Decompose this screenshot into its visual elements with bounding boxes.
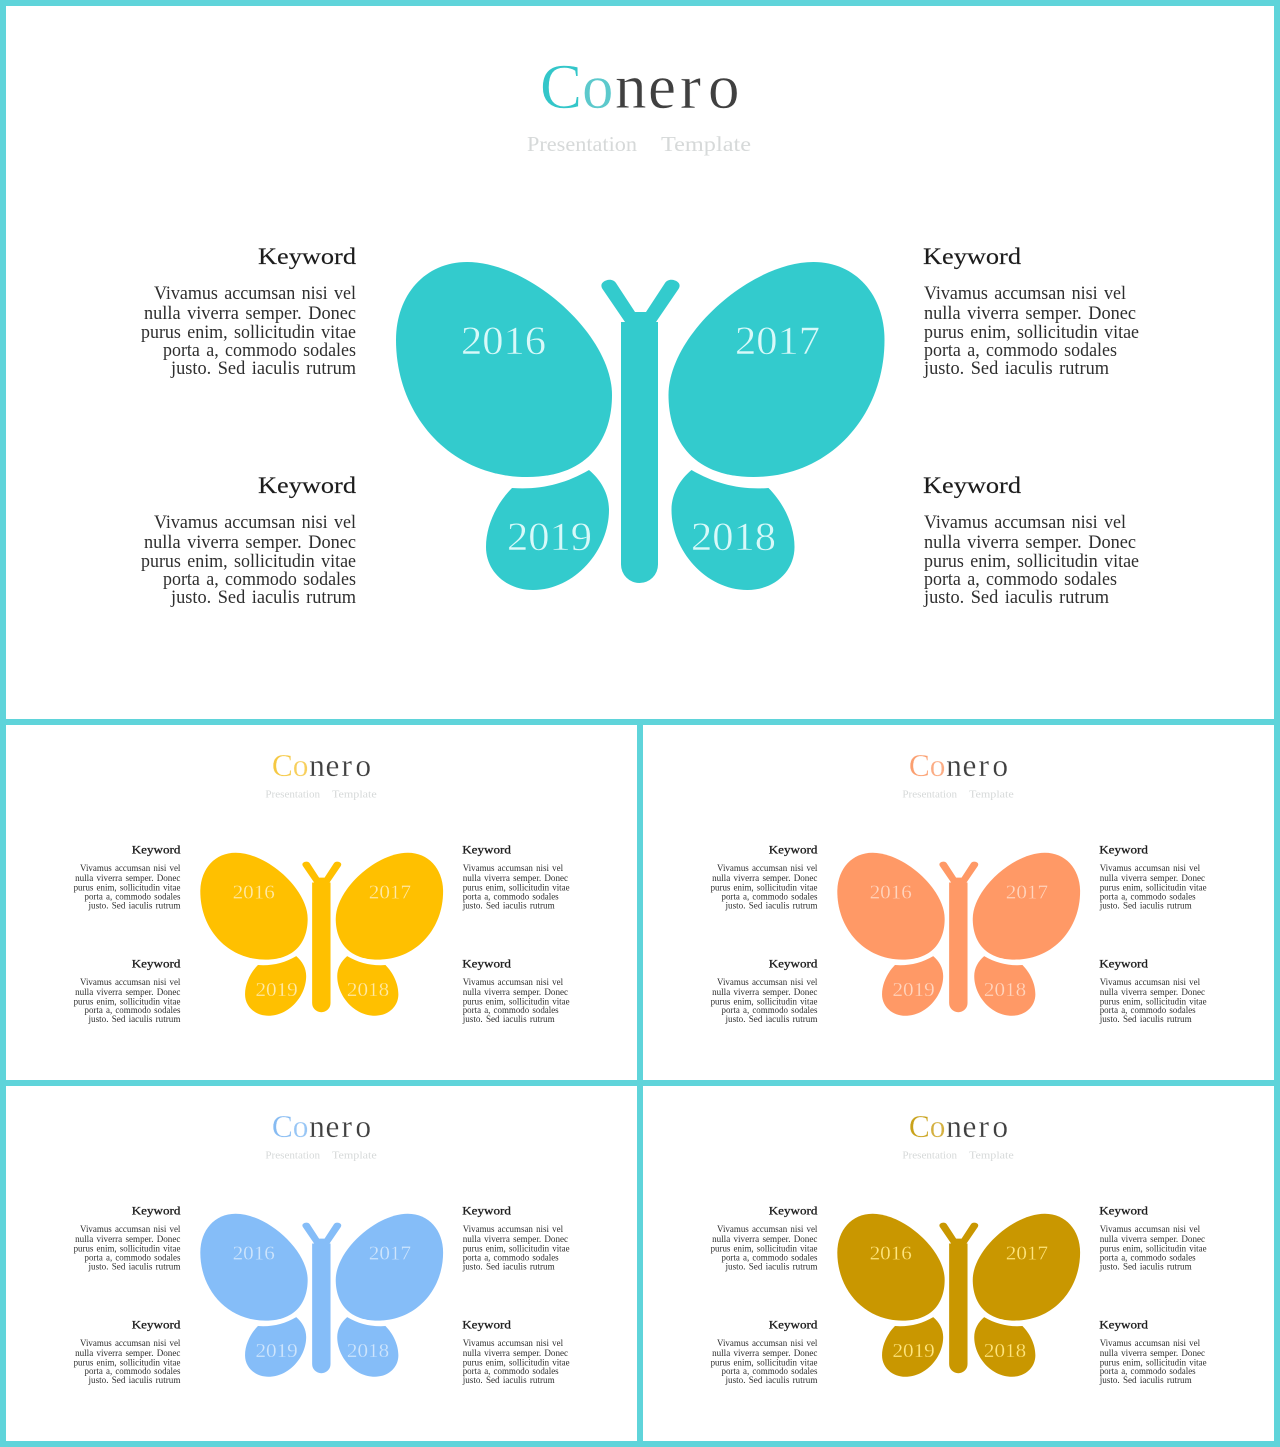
text block: top left: nulla viverra semper. Donec xyxy=(75,874,180,884)
text block: bottom left: Keyword xyxy=(258,473,356,499)
text block: top left: porta a, commodo sodales xyxy=(163,340,356,361)
butterfly: blue xyxy=(200,1214,443,1377)
year labels xyxy=(233,881,411,1001)
year labels xyxy=(233,1242,411,1362)
text block: top left: porta a, commodo sodales xyxy=(722,892,818,902)
text block: bottom right: justo. Sed iaculis rutrum xyxy=(1099,1015,1192,1025)
title: nero xyxy=(309,748,371,783)
text block: bottom right: porta a, commodo sodales xyxy=(924,569,1117,590)
title: C xyxy=(909,748,930,783)
text block: top right: justo. Sed iaculis rutrum xyxy=(462,1262,555,1272)
text block: bottom right: purus enim, sollicitudin vitae xyxy=(463,1358,570,1368)
text block: bottom right: nulla viverra semper. Donec xyxy=(463,988,568,998)
text block: top left: justo. Sed iaculis rutrum xyxy=(88,901,181,911)
title: o xyxy=(293,1109,308,1144)
text block: top left: justo. Sed iaculis rutrum xyxy=(725,1262,818,1272)
year labels: 2018 xyxy=(347,1340,389,1362)
text block: top right: Keyword xyxy=(1099,1205,1148,1218)
text block: bottom left: nulla viverra semper. Donec xyxy=(75,988,180,998)
text block: top left: Keyword xyxy=(132,844,181,857)
text block: top right: Vivamus accumsan nisi vel xyxy=(1100,864,1200,874)
text block: bottom left: purus enim, sollicitudin vitae xyxy=(74,997,180,1007)
text block: top right: Keyword xyxy=(1099,844,1148,857)
text block: top left: justo. Sed iaculis rutrum xyxy=(88,1262,181,1272)
text block: bottom right: Vivamus accumsan nisi vel xyxy=(1100,1339,1200,1349)
text block: top left: Keyword xyxy=(769,1205,818,1218)
text block: top right: Keyword xyxy=(462,844,511,857)
text block: top right: Vivamus accumsan nisi vel xyxy=(463,864,563,874)
year labels: 2016 xyxy=(233,881,275,903)
text block: bottom right: nulla viverra semper. Donec xyxy=(1100,988,1205,998)
subtitle: Template xyxy=(969,790,1014,801)
text block: top left: Keyword xyxy=(132,1205,181,1218)
text block: bottom left: porta a, commodo sodales xyxy=(163,569,356,590)
text block: top right: nulla viverra semper. Donec xyxy=(1100,1235,1205,1245)
year labels xyxy=(870,881,1048,1001)
text block: bottom right: nulla viverra semper. Donec xyxy=(1100,1349,1205,1359)
text block: bottom left: porta a, commodo sodales xyxy=(85,1006,181,1016)
text block: top right: nulla viverra semper. Donec xyxy=(463,1235,568,1245)
text block: bottom right: Keyword xyxy=(462,1319,511,1332)
text block: bottom right xyxy=(923,473,1139,608)
text block: bottom left: Vivamus accumsan nisi vel xyxy=(717,1339,818,1349)
title: C xyxy=(272,748,293,783)
text block: bottom right: purus enim, sollicitudin vitae xyxy=(1100,997,1207,1007)
text block: bottom left: Vivamus accumsan nisi vel xyxy=(80,978,181,988)
subtitle: Presentation xyxy=(527,132,638,156)
text block: top left: purus enim, sollicitudin vitae xyxy=(74,883,180,893)
title: C xyxy=(909,1109,930,1144)
text block: bottom left: Vivamus accumsan nisi vel xyxy=(154,512,356,533)
year labels: 2018 xyxy=(347,979,389,1001)
text block: top left: Vivamus accumsan nisi vel xyxy=(154,283,356,304)
text block: top right: Keyword xyxy=(462,1205,511,1218)
text block: bottom right: purus enim, sollicitudin vitae xyxy=(924,551,1139,572)
text block: top left: purus enim, sollicitudin vitae xyxy=(711,883,817,893)
text block: bottom right: porta a, commodo sodales xyxy=(1100,1006,1196,1016)
text block: top left: purus enim, sollicitudin vitae xyxy=(141,322,356,343)
panel: main teal slide xyxy=(141,52,1139,608)
text block: top left: Vivamus accumsan nisi vel xyxy=(717,864,818,874)
text block: bottom right: justo. Sed iaculis rutrum xyxy=(462,1015,555,1025)
year labels xyxy=(461,318,820,559)
year labels: 2019 xyxy=(255,1340,298,1362)
text block: top left xyxy=(141,244,356,379)
subtitle: Template xyxy=(969,1151,1014,1162)
text block: bottom left: nulla viverra semper. Donec xyxy=(75,1349,180,1359)
year labels: 2019 xyxy=(892,979,935,1001)
year labels: 2017 xyxy=(369,1242,411,1264)
text block: bottom left: purus enim, sollicitudin vitae xyxy=(141,551,356,572)
text block: top left: Keyword xyxy=(769,844,818,857)
subtitle: Template xyxy=(332,1151,377,1162)
text block: top right xyxy=(462,1205,570,1272)
subtitle: Presentation xyxy=(265,790,321,801)
text block: bottom right: Vivamus accumsan nisi vel xyxy=(1100,978,1200,988)
text block: top right: purus enim, sollicitudin vitae xyxy=(1100,883,1207,893)
butterfly: yellow xyxy=(200,853,443,1016)
year labels: 2018 xyxy=(984,1340,1026,1362)
text block: bottom right: nulla viverra semper. Donec xyxy=(924,532,1136,553)
text block: top right: nulla viverra semper. Donec xyxy=(924,303,1136,324)
text block: bottom left: nulla viverra semper. Donec xyxy=(712,1349,817,1359)
text block: bottom right: purus enim, sollicitudin vitae xyxy=(463,997,570,1007)
year labels: 2017 xyxy=(1006,881,1048,903)
text block: top left xyxy=(711,1205,818,1272)
title: nero xyxy=(946,1109,1008,1144)
year labels: 2016 xyxy=(233,1242,275,1264)
text block: bottom right: justo. Sed iaculis rutrum xyxy=(923,587,1109,608)
year labels: 2016 xyxy=(870,1242,912,1264)
butterfly: gold xyxy=(837,1214,1080,1377)
text block: bottom left: porta a, commodo sodales xyxy=(85,1367,181,1377)
text block: top right: justo. Sed iaculis rutrum xyxy=(1099,901,1192,911)
text block: bottom left: nulla viverra semper. Donec xyxy=(712,988,817,998)
year labels: 2017 xyxy=(1006,1242,1048,1264)
panel: blue slide xyxy=(74,1109,570,1386)
year labels: 2018 xyxy=(691,514,776,559)
title: C xyxy=(540,52,582,122)
text block: top right: purus enim, sollicitudin vitae xyxy=(463,883,570,893)
text block: bottom left: porta a, commodo sodales xyxy=(722,1367,818,1377)
year labels: 2016 xyxy=(870,881,912,903)
title: o xyxy=(293,748,308,783)
text block: top right: nulla viverra semper. Donec xyxy=(463,874,568,884)
text block: bottom right: justo. Sed iaculis rutrum xyxy=(1099,1376,1192,1386)
panel: yellow slide xyxy=(74,748,570,1025)
text block: bottom left: Keyword xyxy=(769,1319,818,1332)
title: nero xyxy=(615,52,740,122)
subtitle: Presentation xyxy=(265,1151,321,1162)
text block: top left: Keyword xyxy=(258,244,356,270)
text block: top right: porta a, commodo sodales xyxy=(1100,892,1196,902)
text block: bottom right: Vivamus accumsan nisi vel xyxy=(924,512,1126,533)
text block: top left xyxy=(74,1205,181,1272)
text block: bottom right xyxy=(1099,1319,1207,1386)
text block: bottom left: justo. Sed iaculis rutrum xyxy=(725,1015,818,1025)
text block: top right: Keyword xyxy=(923,244,1021,270)
text block: top left: purus enim, sollicitudin vitae xyxy=(74,1244,180,1254)
text block: top right: nulla viverra semper. Donec xyxy=(1100,874,1205,884)
title: o xyxy=(930,748,945,783)
text block: bottom left: porta a, commodo sodales xyxy=(722,1006,818,1016)
year labels: 2019 xyxy=(892,1340,935,1362)
text block: top right: purus enim, sollicitudin vitae xyxy=(924,322,1139,343)
panel: gold slide xyxy=(711,1109,1207,1386)
text block: top right: purus enim, sollicitudin vitae xyxy=(1100,1244,1207,1254)
title: nero xyxy=(946,748,1008,783)
year labels: 2018 xyxy=(984,979,1026,1001)
text block: bottom left: Keyword xyxy=(132,1319,181,1332)
text block: bottom right: Vivamus accumsan nisi vel xyxy=(463,978,563,988)
text block: top left xyxy=(711,844,818,911)
text block: top right: purus enim, sollicitudin vitae xyxy=(463,1244,570,1254)
subtitle: Template xyxy=(661,132,751,156)
text block: top right: porta a, commodo sodales xyxy=(1100,1253,1196,1263)
text block: top right: justo. Sed iaculis rutrum xyxy=(462,901,555,911)
subtitle: Presentation xyxy=(902,790,958,801)
text block: bottom right: Keyword xyxy=(1099,1319,1148,1332)
text block: bottom right xyxy=(462,958,570,1025)
text block: bottom left: justo. Sed iaculis rutrum xyxy=(170,587,356,608)
title: o xyxy=(582,52,614,122)
subtitle: Presentation xyxy=(902,1151,958,1162)
text block: bottom right: justo. Sed iaculis rutrum xyxy=(462,1376,555,1386)
text block: top right xyxy=(1099,844,1207,911)
text block: top right xyxy=(1099,1205,1207,1272)
year labels: 2017 xyxy=(735,318,820,363)
text block: bottom right xyxy=(1099,958,1207,1025)
text block: bottom left xyxy=(711,958,818,1025)
text block: bottom right: nulla viverra semper. Donec xyxy=(463,1349,568,1359)
butterfly: orange xyxy=(837,853,1080,1016)
text block: top right xyxy=(462,844,570,911)
text block: bottom left: justo. Sed iaculis rutrum xyxy=(88,1376,181,1386)
text block: bottom right: porta a, commodo sodales xyxy=(1100,1367,1196,1377)
year labels: 2016 xyxy=(461,318,546,363)
text block: top left: porta a, commodo sodales xyxy=(722,1253,818,1263)
text block: top left: nulla viverra semper. Donec xyxy=(144,303,356,324)
title: C xyxy=(272,1109,293,1144)
text block: top left: Vivamus accumsan nisi vel xyxy=(80,864,181,874)
text block: bottom left: Keyword xyxy=(132,958,181,971)
text block: top left: porta a, commodo sodales xyxy=(85,892,181,902)
text block: bottom right: porta a, commodo sodales xyxy=(463,1006,559,1016)
text block: top left: nulla viverra semper. Donec xyxy=(712,1235,817,1245)
year labels: 2017 xyxy=(369,881,411,903)
title: nero xyxy=(309,1109,371,1144)
text block: bottom left: purus enim, sollicitudin vitae xyxy=(711,997,817,1007)
text block: top right: Vivamus accumsan nisi vel xyxy=(924,283,1126,304)
text block: bottom left: Vivamus accumsan nisi vel xyxy=(717,978,818,988)
text block: bottom left: purus enim, sollicitudin vitae xyxy=(74,1358,180,1368)
text block: top right: porta a, commodo sodales xyxy=(463,892,559,902)
text block: bottom right xyxy=(462,1319,570,1386)
text block: top left xyxy=(74,844,181,911)
year labels: 2019 xyxy=(255,979,298,1001)
text block: top right: justo. Sed iaculis rutrum xyxy=(923,358,1109,379)
text block: top left: porta a, commodo sodales xyxy=(85,1253,181,1263)
text block: top left: nulla viverra semper. Donec xyxy=(712,874,817,884)
text block: bottom left: nulla viverra semper. Donec xyxy=(144,532,356,553)
year labels: 2019 xyxy=(507,514,592,559)
text block: bottom right: porta a, commodo sodales xyxy=(463,1367,559,1377)
text block: bottom left: Keyword xyxy=(769,958,818,971)
text block: top right: Vivamus accumsan nisi vel xyxy=(1100,1225,1200,1235)
text block: bottom left: Vivamus accumsan nisi vel xyxy=(80,1339,181,1349)
text block: top left: Vivamus accumsan nisi vel xyxy=(80,1225,181,1235)
text block: top right: porta a, commodo sodales xyxy=(463,1253,559,1263)
text block: bottom left: purus enim, sollicitudin vitae xyxy=(711,1358,817,1368)
title: o xyxy=(930,1109,945,1144)
text block: top left: nulla viverra semper. Donec xyxy=(75,1235,180,1245)
text block: top right: justo. Sed iaculis rutrum xyxy=(1099,1262,1192,1272)
butterfly: teal xyxy=(396,262,884,590)
text block: bottom left xyxy=(141,473,356,608)
text block: top right xyxy=(923,244,1139,379)
subtitle: Template xyxy=(332,790,377,801)
text block: top right: Vivamus accumsan nisi vel xyxy=(463,1225,563,1235)
text block: top right: porta a, commodo sodales xyxy=(924,340,1117,361)
text block: bottom left xyxy=(74,958,181,1025)
text block: bottom right: Vivamus accumsan nisi vel xyxy=(463,1339,563,1349)
text block: bottom left xyxy=(74,1319,181,1386)
text block: bottom left: justo. Sed iaculis rutrum xyxy=(725,1376,818,1386)
panel: orange slide xyxy=(711,748,1207,1025)
text block: top left: justo. Sed iaculis rutrum xyxy=(725,901,818,911)
text block: bottom right: Keyword xyxy=(923,473,1021,499)
text block: bottom right: purus enim, sollicitudin vitae xyxy=(1100,1358,1207,1368)
year labels xyxy=(870,1242,1048,1362)
text block: top left: purus enim, sollicitudin vitae xyxy=(711,1244,817,1254)
text block: top left: Vivamus accumsan nisi vel xyxy=(717,1225,818,1235)
text block: bottom left: justo. Sed iaculis rutrum xyxy=(88,1015,181,1025)
text block: top left: justo. Sed iaculis rutrum xyxy=(170,358,356,379)
text block: bottom right: Keyword xyxy=(462,958,511,971)
text block: bottom right: Keyword xyxy=(1099,958,1148,971)
text block: bottom left xyxy=(711,1319,818,1386)
